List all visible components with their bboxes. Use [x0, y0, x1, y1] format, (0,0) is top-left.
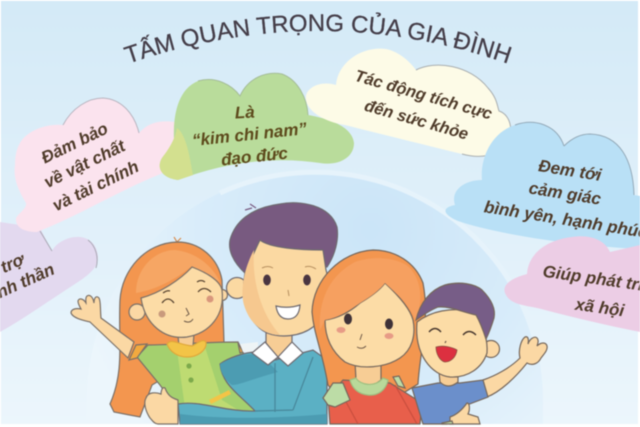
person: boy	[412, 283, 547, 424]
father hair	[230, 203, 338, 273]
boy neck	[439, 372, 458, 386]
person: father	[178, 203, 338, 424]
mother face	[325, 283, 414, 367]
title: TẤM QUAN TRỌNG CỦA GIA ĐÌNH	[122, 12, 512, 64]
person: mother	[312, 250, 425, 424]
cloud: peace and happiness: cảm giác	[527, 178, 603, 209]
girl face	[129, 304, 145, 320]
cloud: peace and happiness	[445, 122, 640, 249]
father face	[244, 240, 329, 336]
boy head	[417, 310, 487, 377]
cloud: material and financial security: Đảm bảo	[38, 119, 111, 167]
cloud: moral compass: Là	[234, 103, 255, 123]
father collar	[252, 342, 278, 365]
father hand	[145, 388, 178, 424]
cloud: moral compass: “kim chi nam”	[191, 119, 308, 150]
father neck	[266, 330, 292, 358]
mother hair	[312, 250, 425, 400]
boy arm and hand	[483, 337, 547, 397]
cloud: moral compass	[160, 73, 354, 180]
girl arm and hand	[71, 295, 134, 358]
cloud: social development: xã hội	[573, 295, 627, 321]
boy thumb	[450, 403, 480, 424]
mother dress	[328, 380, 422, 424]
cloud: positive health effects: đến sức khỏe	[362, 97, 470, 144]
cloud: social development	[504, 236, 640, 332]
boy hair	[416, 283, 494, 339]
person: girl	[71, 237, 256, 417]
cloud: positive health effects	[306, 49, 511, 156]
boy ear	[482, 340, 500, 358]
cloud: material and financial security: và tài chính	[49, 157, 142, 215]
cloud: material and financial security	[15, 98, 180, 232]
cloud: peace and happiness: Đem tới	[537, 156, 604, 185]
cloud: positive health effects: Tác động tích cực	[353, 67, 494, 123]
girl neck	[178, 334, 194, 346]
boy shirt	[412, 380, 488, 424]
girl dress	[137, 342, 256, 412]
father ear	[226, 278, 248, 298]
cloud: spiritual support	[0, 222, 98, 332]
cloud: material and financial security: về vật chất	[41, 136, 129, 192]
mother neck	[355, 362, 381, 388]
father shirt	[178, 350, 327, 424]
cloud: moral compass: đạo đức	[220, 144, 289, 169]
girl collar	[167, 341, 206, 357]
girl hair	[110, 242, 224, 417]
mother collar	[350, 378, 388, 395]
mother sleeves	[323, 383, 350, 407]
